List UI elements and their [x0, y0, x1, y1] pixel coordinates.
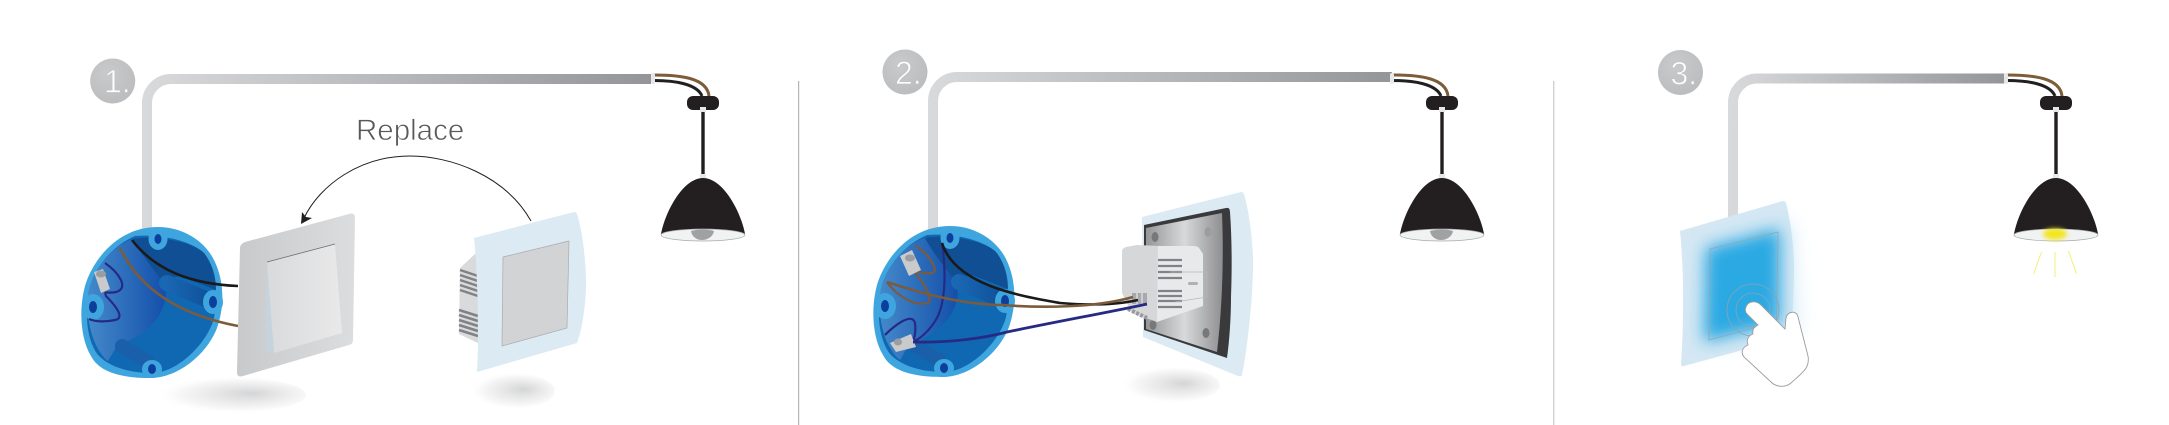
hand icon: [1742, 302, 1808, 386]
device module: [1122, 245, 1207, 322]
navy wire loop: [89, 263, 122, 321]
old switch: [237, 214, 355, 376]
cable conduit: [933, 77, 1392, 230]
wall box: [873, 226, 1015, 377]
lit switch plate: [1680, 201, 1794, 366]
wire connector: [94, 269, 110, 293]
step 1 badge: [90, 58, 135, 104]
device back frame: [1144, 208, 1232, 358]
cable conduit: [147, 79, 651, 232]
navy wire: [913, 304, 1147, 342]
wire connectors: [890, 250, 921, 352]
new switch plate: [474, 212, 586, 372]
shadow under old switch: [138, 376, 306, 414]
divider right: [1553, 81, 1554, 425]
lit pendant lamp: [2004, 73, 2098, 241]
glow behind plate: [1705, 222, 1798, 345]
shadow under new switch: [459, 372, 555, 410]
panel: step 2: [873, 50, 1484, 404]
brown wire: [887, 282, 1133, 307]
internal navy loops: [885, 243, 945, 342]
divider left: [798, 81, 799, 425]
shadow under device: [1108, 366, 1220, 404]
cable conduit: [1733, 78, 2004, 225]
step 1 badge: 1.: [104, 64, 131, 100]
device plate: [1142, 192, 1253, 376]
internal brown loops: [887, 246, 935, 304]
wall box: [81, 227, 223, 378]
black wire: [132, 240, 238, 286]
new switch module: [459, 254, 480, 344]
blue glow: [1704, 228, 1780, 342]
pendant lamp: [651, 73, 745, 241]
step 2 badge: 2.: [895, 55, 922, 91]
touch ripples: [1727, 284, 1779, 336]
black wire: [942, 243, 1138, 304]
replace label: Replace: [356, 114, 464, 147]
replace arrow: [301, 156, 531, 224]
step 3 badge: 3.: [1670, 56, 1697, 92]
panel: step 1: [81, 58, 745, 414]
brown wire: [120, 248, 238, 326]
touch area outline: [1709, 232, 1778, 340]
pendant lamp: [1390, 73, 1484, 241]
step 2 badge: [882, 50, 928, 94]
step 3 badge: [1658, 50, 1703, 95]
light rays: [2034, 251, 2076, 277]
panel: step 3: [1658, 50, 2098, 386]
